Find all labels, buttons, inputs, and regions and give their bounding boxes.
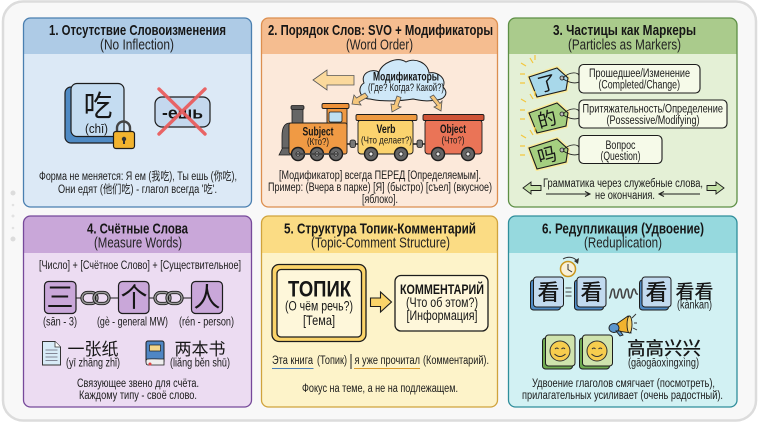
text: explanation 4: Каждому типу - своё слово. — [79, 390, 197, 402]
panel 5: topic-comment — [262, 216, 498, 407]
text: explanation 6 — [522, 378, 723, 402]
icon: paper document — [42, 342, 60, 365]
text: explanation 4: Связующее звено для счёта. — [77, 378, 199, 390]
wagon: object: Object — [440, 124, 466, 136]
text: explanation 2: [яблоко]. — [362, 194, 398, 206]
box: topic: ТОПИК — [288, 276, 351, 302]
example sentence: (Комментарий). — [423, 355, 489, 367]
labels: pinyin: (gè - general MW) — [97, 316, 168, 328]
word: gaogaoxingxing: (gāogāoxìngxìng) — [628, 358, 699, 370]
box: comment: [Информация] — [406, 308, 478, 323]
character: person: 人 — [194, 276, 220, 315]
text: explanation 3: Грамматика через служебные слова, — [543, 178, 703, 190]
icon: book — [146, 341, 164, 366]
cloud: modifiers: (Где? Когда? Какой?) — [368, 82, 444, 94]
heading 1: 1. Отсутствие Словоизменения — [49, 22, 226, 39]
text: formula: [Число] + [Счётное Слово] + [Существительное] — [39, 260, 241, 272]
text: explanation 4 — [77, 378, 199, 402]
label box 3 — [579, 136, 662, 164]
heading 2: 2. Порядок Слов: SVO + Модификаторы — [268, 22, 493, 39]
locomotive — [279, 104, 349, 160]
tag: particle 的 — [520, 91, 727, 134]
card: look 2 — [574, 275, 606, 310]
arrow: topic to comment — [370, 292, 392, 312]
example: two books: (liǎng běn shū) — [170, 358, 230, 370]
label box 2: (Possessive/Modifying) — [606, 115, 700, 127]
label box 2: Притяжательность/Определение — [582, 104, 723, 116]
heading 3 — [553, 22, 696, 54]
panel 1: no inflection — [24, 18, 252, 207]
labels: pinyin: (sān - 3) — [43, 316, 77, 328]
chain link 2 — [149, 292, 191, 304]
tag: particle 的: 的 — [534, 103, 560, 134]
panel 3: particles — [508, 18, 737, 207]
example sentence: я уже прочитал — [354, 355, 420, 367]
text: explanation 3 — [543, 178, 703, 202]
equals sign — [566, 288, 572, 296]
example: one sheet of paper — [66, 335, 120, 370]
heading 1: (No Inflection) — [100, 38, 174, 54]
box: topic — [272, 264, 366, 342]
heading 4: 4. Счётные Слова — [87, 220, 188, 238]
text: explanation 1: Форма не меняется: Я ем (我吃), Ты ешь (你吃), — [39, 170, 237, 183]
example sentence: Эта книга — [272, 355, 313, 367]
card: smile 1 — [542, 335, 575, 369]
wagon: object — [423, 114, 484, 160]
panel 2: word order — [262, 18, 498, 207]
arrow: outline right — [707, 182, 724, 194]
word: kankan: 看看 — [675, 277, 714, 304]
heading 3: 3. Частицы как Маркеры — [553, 22, 696, 39]
word: gaogaoxingxing: 高高兴兴 — [627, 335, 701, 361]
icon: spring — [609, 289, 638, 298]
chain link 1 — [76, 292, 118, 304]
heading 6: 6. Редупликация (Удвоение) — [542, 220, 704, 238]
train — [279, 104, 484, 160]
locomotive: (Кто?) — [307, 136, 329, 148]
heading 2: (Word Order) — [346, 38, 413, 54]
text: explanation 2: [Модификатор] всегда ПЕРЕД [Определяемым]. — [279, 170, 481, 182]
heading 5: (Topic-Comment Structure) — [311, 236, 450, 252]
card: look 3 — [640, 275, 671, 310]
heading 1 — [49, 22, 226, 54]
locomotive: Subject — [302, 126, 334, 138]
example: two books — [170, 335, 230, 370]
heading 2 — [268, 22, 493, 54]
example sentence: (Топик) — [317, 355, 347, 367]
icon: megaphone — [609, 314, 637, 336]
tag: particle 了 — [520, 55, 700, 98]
heading 6 — [542, 220, 704, 252]
box: topic: [Тема] — [303, 313, 335, 328]
coupler 1 — [347, 140, 358, 148]
label box 1: Прошедшее/Изменение — [589, 68, 690, 80]
heading 4: (Measure Words) — [94, 236, 182, 252]
labels: pinyin — [43, 316, 234, 328]
heading 3: (Particles as Markers) — [568, 38, 681, 54]
label box 3: Вопрос — [606, 140, 636, 152]
arrow: thin right — [546, 192, 590, 196]
text: explanation 1: Они едят (他们吃) - глагол всегда '吃'. — [58, 182, 217, 196]
card: look 2: 看 — [580, 275, 603, 307]
heading 5: 5. Структура Топик-Комментарий — [284, 220, 476, 238]
heading 5 — [284, 220, 476, 252]
label box 3: (Question) — [600, 151, 641, 163]
character: three: 三 — [46, 276, 74, 315]
text: explanation 1 — [39, 170, 237, 196]
icon: clock — [560, 257, 579, 276]
icon: locked character key: 吃 — [83, 83, 113, 125]
wagon: object: (Что?) — [442, 134, 464, 146]
box: comment: КОММЕНТАРИЙ — [400, 282, 484, 297]
label box 1: (Completed/Change) — [598, 80, 680, 92]
panel 4: measure words — [24, 216, 252, 407]
label box 1 — [579, 64, 700, 93]
chain of characters — [44, 276, 222, 315]
wagon: verb: Verb — [376, 124, 396, 136]
coupler 2 — [413, 140, 425, 148]
wagon: verb — [356, 114, 417, 160]
example sentence — [272, 354, 489, 369]
card: look 3: 看 — [645, 275, 668, 307]
cloud: modifiers — [360, 60, 446, 101]
arrow: modifiers move left — [313, 70, 354, 90]
label box 2 — [579, 100, 727, 128]
panel 6: reduplication — [508, 216, 737, 407]
arrow: outline left — [523, 182, 541, 194]
example: one sheet of paper: 一张纸 — [68, 335, 118, 360]
tag: particle 吗 — [520, 127, 662, 170]
word: kankan: (kànkan) — [677, 300, 712, 312]
labels: pinyin: (rén - person) — [179, 316, 234, 328]
cloud: modifiers: Модификаторы — [373, 72, 439, 84]
text: explanation 5: Фокус на теме, а не на подлежащем. — [302, 383, 458, 395]
text: explanation 3: не окончания. — [595, 190, 655, 202]
arrows: modifiers to train — [352, 93, 442, 112]
icon: locked character key: (chī) — [85, 121, 108, 136]
box: comment: (Что об этом?) — [406, 295, 478, 310]
tag: particle 了: 了 — [534, 67, 560, 98]
text: explanation 2 — [268, 170, 492, 206]
example: two books: 两本书 — [174, 335, 226, 360]
box: topic: (О чём речь?) — [285, 298, 353, 314]
card: look 1: 看 — [537, 275, 560, 307]
card: smile 2 — [580, 335, 612, 369]
icon: crossed-out ending: -ешь — [162, 104, 203, 122]
wagon: verb: (Что делает?) — [361, 134, 412, 146]
heading 4 — [87, 220, 188, 252]
text: explanation 2: Пример: (Вчера в парке) [Я] (быстро) [съел] (вкусное) — [268, 182, 492, 194]
card: look 1 — [530, 275, 564, 310]
icon: locked character key — [65, 83, 134, 148]
icon: crossed-out ending — [155, 89, 210, 134]
tag: particle 吗: 吗 — [534, 139, 560, 170]
box: comment — [395, 276, 488, 331]
example: one sheet of paper: (yī zhāng zhǐ) — [66, 358, 120, 370]
arrow: thin left — [659, 192, 700, 196]
heading 6: (Reduplication) — [584, 236, 662, 252]
character: general measure word: 个 — [120, 276, 148, 315]
text: explanation 6: Удвоение глаголов смягчает (посмотреть), — [532, 378, 715, 390]
